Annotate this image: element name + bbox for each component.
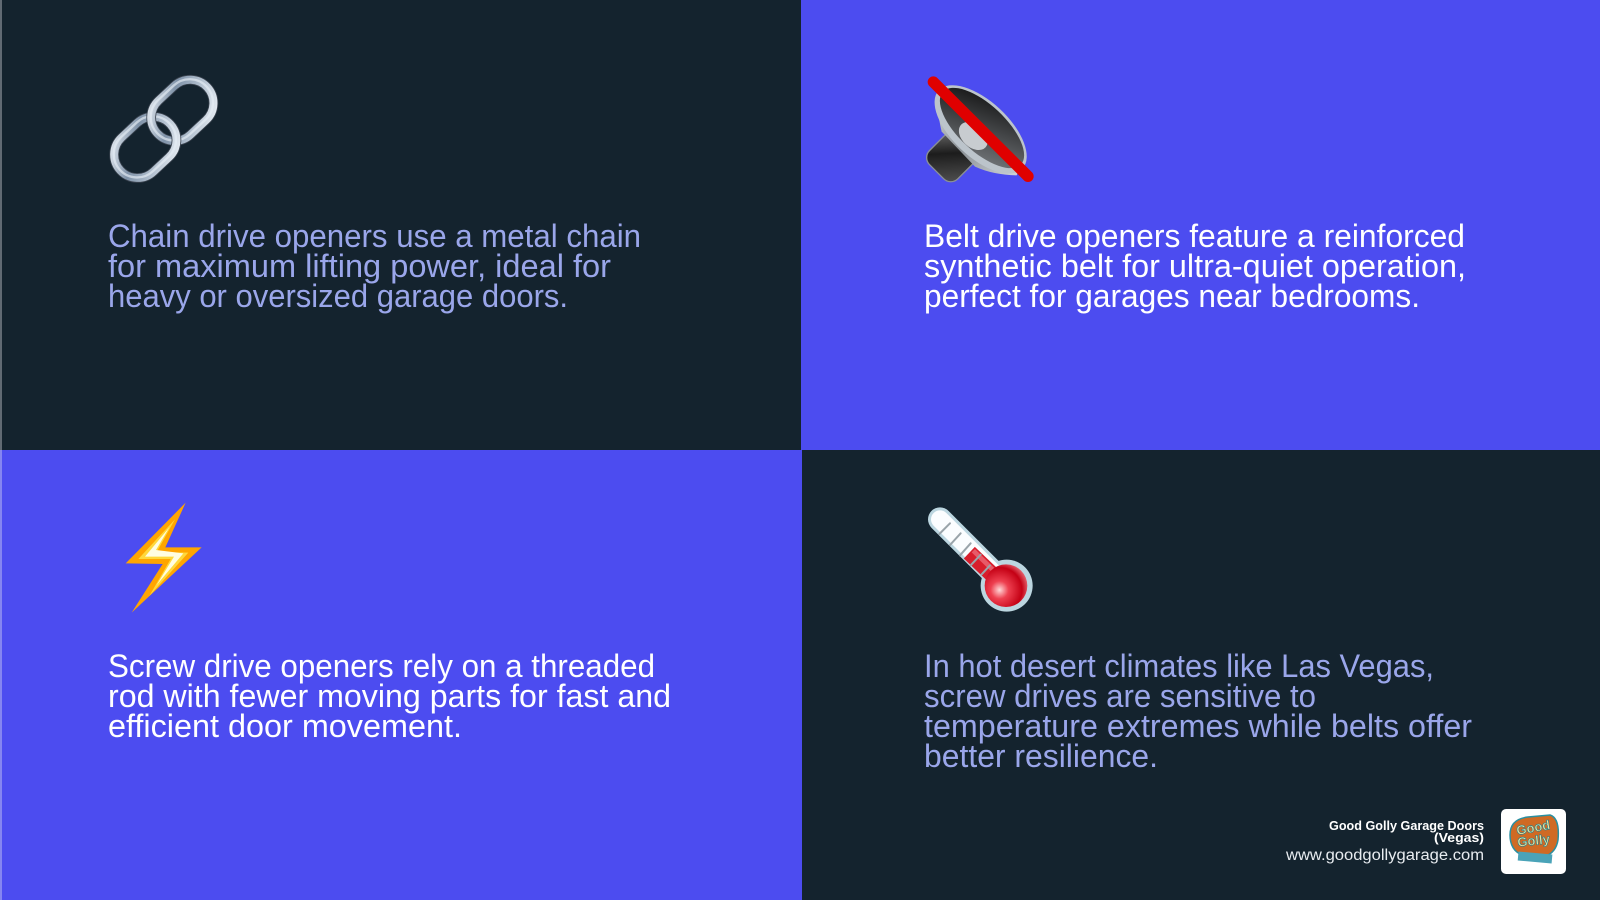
text: screw drive description: rod with fewer moving parts for fast and [108, 678, 671, 714]
logo: Golly [1517, 831, 1551, 850]
text: belt drive description: perfect for garages near bedrooms. [924, 278, 1420, 314]
text: belt drive description: Belt drive openers feature a reinforced [924, 218, 1465, 254]
text: hot climate description: temperature extremes while belts offer [924, 708, 1472, 744]
logo: Good [1515, 817, 1551, 838]
text: screw drive description: Screw drive openers rely on a threaded [108, 648, 655, 684]
icon: muted speaker [920, 70, 1042, 189]
icon: thermometer [939, 519, 1033, 612]
icon: lightning bolt [126, 503, 202, 613]
panel: chain drive [108, 74, 639, 314]
left edge strip [0, 0, 2, 900]
text: hot climate description: screw drives are sensitive to [924, 678, 1316, 714]
text: hot climate description: In hot desert climates like Las Vegas, [924, 648, 1434, 684]
text: hot climate description: better resilience. [924, 738, 1158, 774]
logo [1501, 809, 1566, 874]
panel: screw drive [0, 450, 802, 900]
text: belt drive description: synthetic belt for ultra-quiet operation, [924, 248, 1466, 284]
brand name: (Vegas) [1434, 830, 1484, 845]
text: chain drive description: heavy or oversized garage doors. [108, 278, 568, 314]
brand name: Good Golly Garage Doors [1329, 818, 1484, 833]
panel: belt drive [801, 0, 1600, 450]
panel: hot climate [802, 450, 1600, 900]
website url: www.goodgollygarage.com [1285, 847, 1484, 864]
text: chain drive description: for maximum lifting power, ideal for [108, 248, 611, 284]
brand block [1285, 809, 1566, 874]
text: screw drive description: efficient door movement. [108, 708, 462, 744]
text: chain drive description: Chain drive openers use a metal chain [108, 218, 641, 254]
icon: chain links [109, 74, 218, 183]
